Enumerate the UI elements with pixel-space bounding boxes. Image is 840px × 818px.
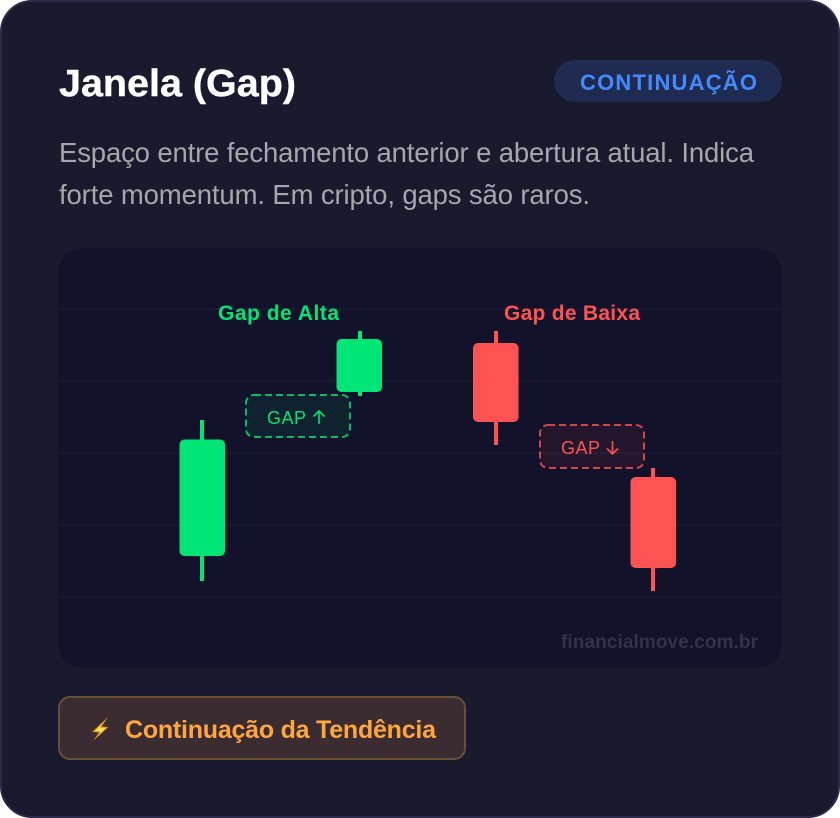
candle: bullish after gap <box>336 331 382 396</box>
signal button <box>59 697 465 759</box>
gap up marker: GAP <box>267 408 306 428</box>
icon: arrow down <box>607 441 618 454</box>
description text: forte momentum. Em cripto, gaps são raros. <box>59 179 590 210</box>
icon: arrow up <box>314 411 324 424</box>
panel: candlestick chart <box>58 248 782 668</box>
description text <box>59 137 755 210</box>
icon: lightning bolt <box>92 717 108 741</box>
candle: bearish after gap <box>630 468 676 591</box>
gap up marker <box>246 395 350 437</box>
label: gap de baixa: Gap de Baixa <box>504 302 640 325</box>
label: gap de alta: Gap de Alta <box>218 302 339 325</box>
badge: continuação <box>554 60 782 102</box>
watermark: financialmove.com.br <box>561 632 759 653</box>
badge: continuação: CONTINUAÇÃO <box>580 70 757 95</box>
candle: bearish before gap <box>473 331 518 445</box>
signal button: Continuação da Tendência <box>125 716 437 744</box>
gap down marker <box>540 425 644 468</box>
candle: bullish large <box>180 420 225 581</box>
description text: Espaço entre fechamento anterior e abertura atual. Indica <box>59 137 755 168</box>
title: Janela (Gap) <box>59 63 296 105</box>
gap down marker: GAP <box>561 438 600 458</box>
